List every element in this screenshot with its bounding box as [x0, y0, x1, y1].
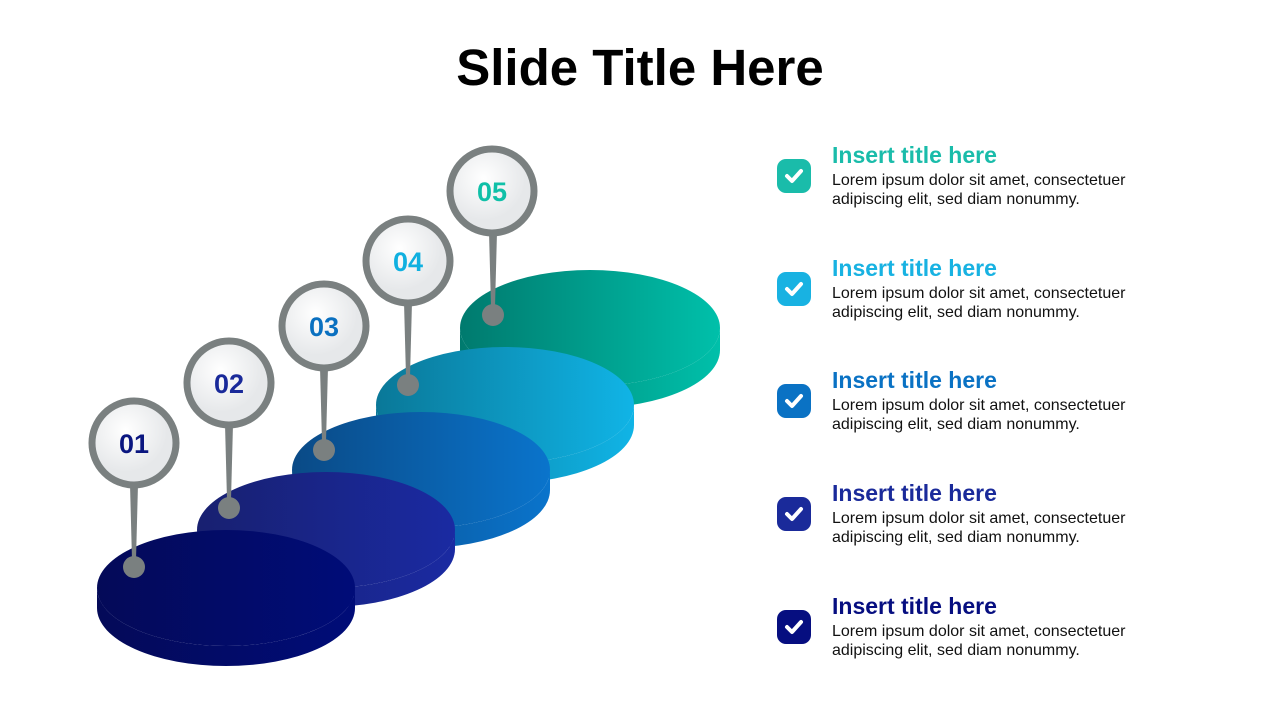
pin 03: 03: [309, 312, 339, 342]
text 5: adipiscing elit, sed diam nonummy.: [832, 642, 1080, 659]
pin 01: 01: [119, 429, 149, 459]
icon: check teal: [777, 159, 811, 193]
text 2: Lorem ipsum dolor sit amet, consectetuer: [832, 285, 1125, 302]
diagram: stacked disks with pins: [88, 146, 720, 666]
disk 4: [376, 347, 634, 483]
item 1: [777, 142, 1126, 208]
text 2: adipiscing elit, sed diam nonummy.: [832, 304, 1080, 321]
pin 01: [92, 401, 176, 578]
title 4: Insert title here: [832, 480, 997, 506]
text 4: [832, 510, 1126, 546]
pin 04: [366, 219, 450, 396]
text 5: Lorem ipsum dolor sit amet, consectetuer: [832, 623, 1125, 640]
text 2: [832, 285, 1126, 321]
pin 03: [282, 284, 366, 461]
icon: check blue: [777, 384, 811, 418]
title: Slide Title Here: [456, 39, 824, 96]
text 3: Lorem ipsum dolor sit amet, consectetuer: [832, 397, 1125, 414]
title 2: Insert title here: [832, 255, 997, 281]
item 2: [777, 255, 1126, 321]
icon: check navy: [777, 610, 811, 644]
text 5: [832, 623, 1126, 659]
pin 02: [187, 341, 271, 519]
text 4: adipiscing elit, sed diam nonummy.: [832, 529, 1080, 546]
text 3: adipiscing elit, sed diam nonummy.: [832, 416, 1080, 433]
pin 04: 04: [393, 247, 423, 277]
disk 5: [460, 270, 720, 408]
pin 05: [450, 149, 534, 326]
text 1: adipiscing elit, sed diam nonummy.: [832, 191, 1080, 208]
icon: check indigo: [777, 497, 811, 531]
item 5: [777, 593, 1126, 659]
pin 02: 02: [214, 369, 244, 399]
icon: check sky: [777, 272, 811, 306]
disk 2: [197, 472, 455, 607]
item 3: [777, 367, 1126, 433]
title 3: Insert title here: [832, 367, 997, 393]
pin 05: 05: [477, 177, 507, 207]
text 1: Lorem ipsum dolor sit amet, consectetuer: [832, 172, 1125, 189]
disk 1: [97, 530, 355, 666]
text 3: [832, 397, 1126, 433]
item 4: [777, 480, 1126, 546]
disk 3: [292, 412, 550, 548]
title 5: Insert title here: [832, 593, 997, 619]
text 4: Lorem ipsum dolor sit amet, consectetuer: [832, 510, 1125, 527]
text 1: [832, 172, 1126, 208]
title 1: Insert title here: [832, 142, 997, 168]
